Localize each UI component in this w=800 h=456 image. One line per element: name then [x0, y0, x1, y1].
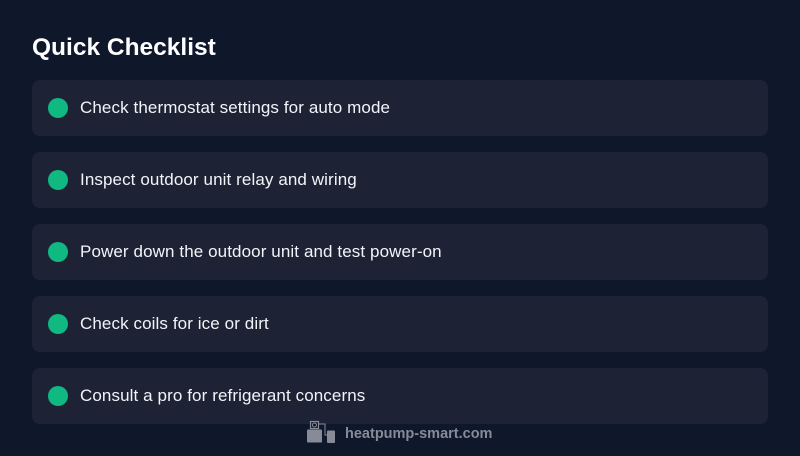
checklist item 2: Inspect outdoor unit relay and wiring	[80, 170, 357, 189]
checklist item 1: Check thermostat settings for auto mode	[80, 98, 390, 117]
checklist item 1	[32, 80, 768, 136]
brand name: heatpump-smart.com	[345, 426, 492, 442]
checklist item 4: Check coils for ice or dirt	[80, 314, 269, 333]
checklist item 4	[32, 296, 768, 352]
checklist item 5: Consult a pro for refrigerant concerns	[80, 386, 365, 405]
checklist item 3: Power down the outdoor unit and test power-on	[80, 242, 442, 261]
checklist item 3	[32, 224, 768, 280]
icon: heat pump	[307, 420, 335, 443]
footer logo	[307, 420, 492, 443]
checklist item 5	[32, 368, 768, 424]
checklist item 2	[32, 152, 768, 208]
title: Quick Checklist	[32, 34, 216, 61]
